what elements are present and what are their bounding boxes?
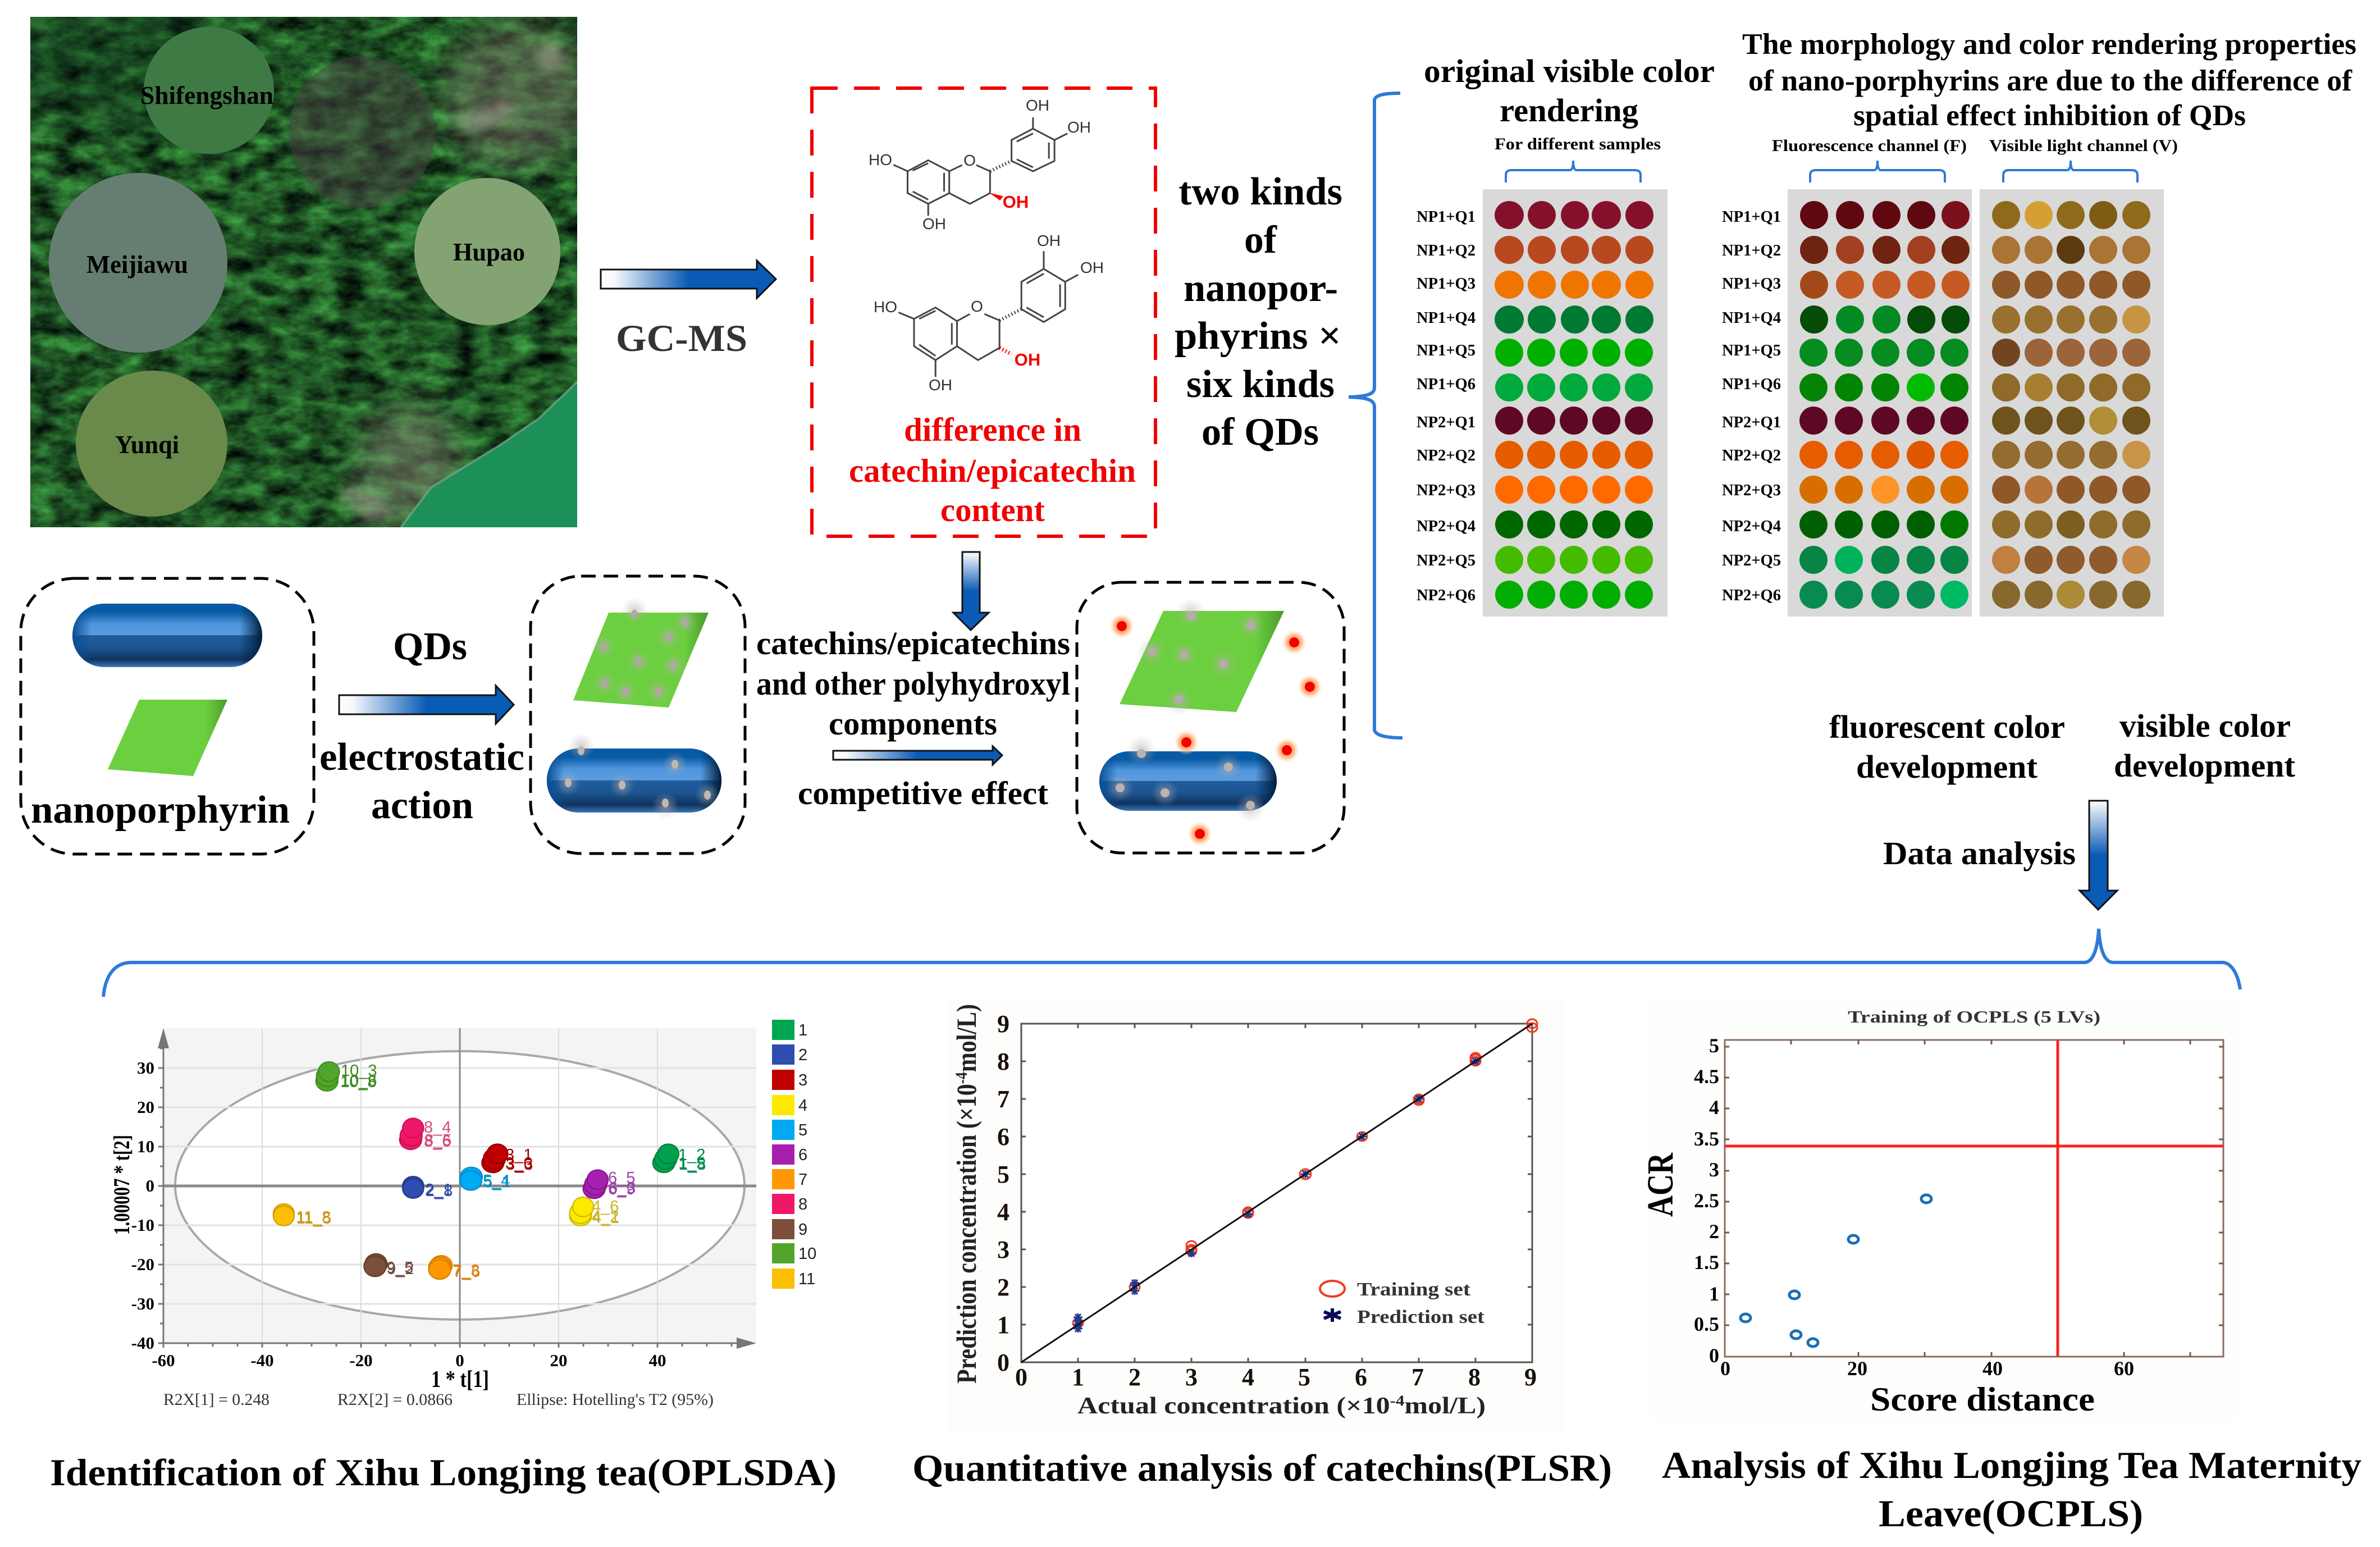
- title: OPLSDA: Identification of Xihu Longjing tea(OPLSDA): [50, 1451, 837, 1494]
- text: visible color development: visible color: [2119, 708, 2291, 744]
- x axis title: Actual concentration (×10: [1077, 1393, 1340, 1419]
- brace: array group: [1349, 93, 1403, 738]
- row labels: original array: NP2+Q4: [1417, 518, 1475, 535]
- row labels: original array: NP2+Q6: [1417, 587, 1475, 604]
- legend: [772, 1020, 816, 1289]
- panel: nanoporphyrin: [21, 578, 314, 854]
- row labels: original array: NP1+Q6: [1417, 376, 1475, 393]
- panel: fluorescence channel array: [1788, 189, 1972, 617]
- y tick labels: [997, 1010, 1009, 1376]
- row labels: original array: NP1+Q3: [1417, 275, 1475, 293]
- y axis title: Prediction concentration (×10: [951, 1026, 982, 1384]
- row labels: channel arrays: NP1+Q6: [1722, 376, 1781, 393]
- molecule: epicatechin: [874, 232, 1104, 394]
- x tick labels: 40: [649, 1350, 666, 1370]
- row labels: original array: NP1+Q5: [1417, 342, 1475, 359]
- x axis title: Score distance: [1870, 1381, 2095, 1418]
- molecule: catechin: OH: [1003, 192, 1029, 212]
- y axis title: ACR: [1640, 1152, 1681, 1217]
- y tick labels: [131, 1058, 154, 1353]
- text: Data analysis: Data analysis: [1883, 835, 2076, 871]
- row labels: channel arrays: NP2+Q2: [1722, 447, 1781, 464]
- x tick labels: -40: [250, 1350, 274, 1370]
- legend: 1: [798, 1021, 807, 1039]
- legend: 11: [798, 1270, 815, 1288]
- legend: 5: [798, 1121, 807, 1139]
- sample clusters: [273, 1062, 679, 1279]
- icon: green nanosheet: [108, 700, 227, 776]
- arrow: add QDs: [339, 686, 514, 724]
- molecule: epicatechin: HO: [874, 298, 897, 316]
- satellite map panel: [30, 17, 577, 527]
- brace: fluorescence: [1810, 161, 1945, 182]
- sample labels: 5_4: [483, 1172, 510, 1190]
- legend: 8: [798, 1195, 807, 1213]
- label: electrostatic action: [319, 736, 524, 827]
- text: fluorescent color development: development: [1856, 749, 2038, 785]
- caption: Fluorescence channel: Fluorescence channel (F): [1772, 136, 1967, 155]
- y tick labels: 5: [997, 1161, 1009, 1188]
- molecule: catechin: O: [963, 152, 976, 169]
- y tick labels: 2: [997, 1274, 1009, 1301]
- sample labels: 8_5: [424, 1131, 451, 1149]
- text: catechins/epicatechins and other polyhydroxyl components: [756, 625, 1070, 742]
- text: visible color development: [2114, 708, 2296, 784]
- label: competitive effect: competitive effect: [798, 775, 1049, 811]
- x tick labels: 40: [1982, 1357, 2003, 1380]
- row labels: original array: NP1+Q1: [1417, 208, 1475, 226]
- y tick labels: 3: [1709, 1158, 1719, 1181]
- legend: 10: [798, 1245, 816, 1263]
- y tick labels: 0.5: [1694, 1313, 1719, 1335]
- text: two kinds of nanoporphyrins x six kinds of QDs: nanopor-: [1184, 267, 1338, 310]
- y tick labels: 3.5: [1694, 1128, 1719, 1150]
- panel: competitive release of QDs: [1077, 582, 1344, 853]
- sample labels: 9_5: [386, 1259, 413, 1277]
- y tick labels: 5: [1709, 1034, 1719, 1057]
- legend: 6: [798, 1146, 807, 1164]
- location: Meijiawu: Meijiawu: [86, 250, 188, 279]
- y axis title: mol/L): [951, 1004, 982, 1072]
- x tick labels: 20: [1847, 1357, 1867, 1380]
- location: Hupao: [414, 178, 560, 325]
- molecule: catechin: OH: [1026, 97, 1049, 114]
- caption: Visible light channel: Visible light channel (V): [1989, 136, 2178, 155]
- y tick labels: 0: [1709, 1344, 1719, 1367]
- row labels: channel arrays: NP2+Q1: [1722, 414, 1781, 431]
- arrow: catechin difference down: [953, 552, 989, 630]
- y tick labels: [1694, 1034, 1719, 1367]
- sample labels: 3_6: [505, 1154, 532, 1172]
- y tick labels: 6: [997, 1123, 1009, 1151]
- row labels: channel arrays: NP2+Q4: [1722, 518, 1781, 535]
- location: Shifengshan: Shifengshan: [140, 81, 273, 109]
- y tick labels: -10: [131, 1215, 154, 1235]
- red caption: content: [940, 491, 1045, 528]
- footnote R2X and ellipse: [163, 1390, 714, 1409]
- y tick labels: 2: [1709, 1220, 1719, 1243]
- row labels: original array: NP1+Q4: [1417, 309, 1475, 327]
- sample labels: 1_2: [678, 1146, 705, 1164]
- x tick labels: -60: [152, 1350, 175, 1370]
- footnote R2X and ellipse: R2X[2] = 0.0866: [337, 1390, 453, 1409]
- sample labels: 8_6: [424, 1133, 451, 1151]
- molecule: epicatechin: OH: [1037, 232, 1061, 249]
- sample labels: 4_1: [592, 1209, 619, 1227]
- text: two kinds of nanoporphyrins x six kinds of QDs: phyrins ×: [1175, 314, 1341, 358]
- y tick labels: 8: [997, 1048, 1009, 1075]
- title: OCPLS: Analysis of Xihu Longjing Tea Maternity: [1662, 1444, 2361, 1486]
- x tick labels: 2: [1129, 1363, 1141, 1391]
- x axis title: mol/L): [1404, 1393, 1486, 1419]
- x tick labels: 5: [1298, 1363, 1310, 1391]
- row labels: channel arrays: NP1+Q5: [1722, 342, 1781, 359]
- panel: catechin epicatechin difference: [812, 88, 1155, 536]
- panel: original color array: [1483, 189, 1668, 617]
- location: Yunqi: Yunqi: [115, 431, 179, 459]
- y tick labels: 20: [137, 1097, 154, 1117]
- text: catechins/epicatechins and other polyhydroxyl components: and other polyhydroxyl: [756, 665, 1070, 702]
- chart: OPLS-DA score plot: [109, 1020, 816, 1409]
- y tick labels: 1: [1709, 1283, 1719, 1305]
- y tick labels: 3: [997, 1236, 1009, 1263]
- label: nanoporphyrin: nanoporphyrin: [31, 788, 290, 832]
- y axis title: -4: [952, 1072, 971, 1084]
- icon: blue nanorod: [72, 604, 262, 667]
- x tick labels: 0: [455, 1350, 464, 1370]
- label: QDs: QDs: [393, 625, 467, 668]
- training samples: [1741, 1195, 1931, 1347]
- row labels: original array: NP1+Q2: [1417, 242, 1475, 259]
- x tick labels: 0: [1720, 1357, 1730, 1380]
- row labels: channel arrays: NP2+Q6: [1722, 587, 1781, 604]
- row labels: original array: NP2+Q1: [1417, 414, 1475, 431]
- brace: samples: [1506, 161, 1641, 182]
- x axis title: 1 * t[1]: [431, 1367, 489, 1393]
- text: two kinds of nanoporphyrins x six kinds of QDs: of: [1244, 218, 1277, 262]
- red caption: catechin/epicatechin: [849, 452, 1136, 489]
- text: visible color development: development: [2114, 747, 2296, 784]
- arrow: competition: [833, 746, 1002, 765]
- sample labels: 10_3: [341, 1062, 377, 1080]
- brace: visible: [2003, 161, 2137, 182]
- molecule: catechin: OH: [922, 215, 946, 232]
- heading: original visible color rendering: rendering: [1500, 92, 1638, 129]
- footnote R2X and ellipse: Ellipse: Hotelling's T2 (95%): [517, 1390, 714, 1409]
- y tick labels: 10: [137, 1137, 154, 1156]
- text: fluorescent color development: [1829, 709, 2065, 785]
- sample labels: 11_8: [296, 1208, 331, 1226]
- row labels: original array: NP2+Q2: [1417, 447, 1475, 464]
- row labels: original array: [1417, 208, 1475, 604]
- arrow: data analysis down: [2080, 801, 2117, 910]
- heading: morphology and color rendering: spatial effect inhibition of QDs: [1853, 99, 2246, 132]
- sample labels: 9_2: [387, 1260, 414, 1278]
- sample labels: 7_3: [453, 1262, 479, 1280]
- x tick labels: 0: [1015, 1363, 1027, 1391]
- sample labels: 11_5: [296, 1210, 331, 1227]
- row labels: channel arrays: NP1+Q3: [1722, 275, 1781, 293]
- sample labels: 3_3: [506, 1156, 533, 1174]
- text: two kinds of nanoporphyrins x six kinds of QDs: six kinds: [1186, 363, 1335, 406]
- icon: blue rod with QDs: [547, 733, 721, 819]
- icon: released red QDs: [1109, 614, 1322, 846]
- row labels: channel arrays: NP1+Q1: [1722, 208, 1781, 226]
- y tick labels: 9: [997, 1010, 1009, 1038]
- sample labels: 7_6: [453, 1263, 480, 1281]
- x tick labels: 1: [1072, 1363, 1084, 1391]
- text: catechins/epicatechins and other polyhydroxyl components: catechins/epicatechins: [756, 625, 1070, 661]
- chart title: Training of OCPLS (5 LVs): [1848, 1007, 2100, 1026]
- y axis title: 1.00007 * t[2]: [109, 1135, 134, 1235]
- sample labels: 5_1: [483, 1173, 510, 1191]
- sample labels: 2_1: [425, 1181, 452, 1199]
- text: two kinds of nanoporphyrins x six kinds of QDs: two kinds: [1178, 170, 1342, 213]
- title: OCPLS: [1662, 1444, 2361, 1535]
- x tick labels: 4: [1242, 1363, 1254, 1391]
- sample labels: 4_6: [592, 1198, 619, 1216]
- molecule: epicatechin: OH: [1015, 350, 1040, 369]
- legend: 9: [798, 1221, 807, 1239]
- title: PLSR: Quantitative analysis of catechins(PLSR): [912, 1446, 1612, 1489]
- icon: blue rod after release: [1099, 736, 1277, 822]
- sample labels: 10_6: [341, 1072, 377, 1090]
- row labels: channel arrays: [1722, 208, 1781, 604]
- heading: original visible color rendering: original visible color: [1424, 53, 1715, 89]
- arrow: map to GC-MS: [601, 261, 776, 298]
- molecule: catechin: OH: [1067, 118, 1091, 136]
- x tick labels: 6: [1355, 1363, 1367, 1391]
- molecule: epicatechin: OH: [1080, 259, 1104, 276]
- heading: morphology and color rendering: The morphology and color rendering properties: [1742, 28, 2356, 61]
- sample labels: 10_8: [340, 1073, 377, 1091]
- x tick labels: -20: [349, 1350, 373, 1370]
- location: Shifengshan: [140, 27, 274, 154]
- sample labels: 6_9: [608, 1180, 635, 1198]
- label: electrostatic action: action: [371, 784, 473, 827]
- sample labels: 1_8: [679, 1156, 706, 1174]
- location: Meijiawu: [49, 173, 227, 353]
- y tick labels: 1.5: [1694, 1251, 1719, 1274]
- footnote R2X and ellipse: R2X[1] = 0.248: [163, 1390, 269, 1409]
- threshold lines: [1725, 1040, 2223, 1357]
- chart: PLSR prediction vs actual: [948, 1000, 1565, 1432]
- y tick labels: 4: [997, 1198, 1009, 1226]
- row labels: original array: NP2+Q5: [1417, 552, 1475, 569]
- icon: green sheet after release: [1120, 599, 1284, 715]
- sample labels: 3_1: [505, 1146, 532, 1164]
- x axis title: -4: [1390, 1393, 1404, 1409]
- location: Hupao: Hupao: [453, 238, 525, 266]
- sample labels: 8_4: [424, 1119, 451, 1137]
- chart: OCPLS training: [1640, 1000, 2237, 1421]
- y tick labels: 4: [1709, 1096, 1719, 1119]
- row labels: channel arrays: NP1+Q2: [1722, 242, 1781, 259]
- text: fluorescent color development: fluorescent color: [1829, 709, 2065, 745]
- y tick labels: 0: [146, 1176, 154, 1195]
- y tick labels: -20: [131, 1254, 154, 1274]
- training points: [1073, 1019, 1537, 1327]
- sample labels: 2_8: [426, 1182, 453, 1200]
- legend: 7: [798, 1171, 807, 1189]
- sample labels: 6_5: [608, 1169, 635, 1187]
- x tick labels: 60: [2114, 1357, 2134, 1380]
- GC-MS label: GC-MS: [616, 317, 747, 359]
- sample labels: 6_3: [609, 1179, 636, 1197]
- prediction points: [1073, 1057, 1480, 1332]
- caption: For different samples: For different samples: [1495, 135, 1661, 153]
- red caption: [849, 411, 1136, 528]
- heading: morphology and color rendering: [1742, 28, 2356, 132]
- y tick labels: 0: [997, 1349, 1009, 1376]
- y tick labels: -40: [131, 1333, 154, 1353]
- molecule: catechin: [869, 97, 1091, 232]
- legend: 3: [798, 1071, 807, 1089]
- heading: original visible color rendering: [1424, 53, 1715, 129]
- row labels: channel arrays: NP2+Q3: [1722, 482, 1781, 499]
- panel: QD-loaded nanoporphyrin: [531, 576, 745, 854]
- location: Yunqi: [76, 371, 227, 517]
- row labels: channel arrays: NP1+Q4: [1722, 309, 1781, 327]
- x tick labels: 7: [1411, 1363, 1424, 1391]
- text: catechins/epicatechins and other polyhydroxyl components: components: [829, 705, 997, 742]
- row labels: channel arrays: NP2+Q5: [1722, 552, 1781, 569]
- title: OCPLS: Leave(OCPLS): [1879, 1492, 2143, 1535]
- legend: [1320, 1279, 1485, 1327]
- y tick labels: 7: [997, 1085, 1009, 1113]
- x tick labels: [1720, 1357, 2134, 1380]
- panel: visible light channel array: [1980, 189, 2164, 617]
- sample labels: 1_5: [678, 1154, 705, 1172]
- molecule: epicatechin: O: [971, 298, 983, 315]
- red caption: difference in: [904, 411, 1081, 448]
- y tick labels: 30: [137, 1058, 154, 1078]
- y tick labels: 2.5: [1694, 1189, 1719, 1212]
- y tick labels: 4.5: [1694, 1065, 1719, 1088]
- molecule: epicatechin: OH: [929, 376, 952, 394]
- legend: 4: [798, 1097, 807, 1115]
- x tick labels: [1015, 1363, 1537, 1391]
- heading: morphology and color rendering: of nano-porphyrins are due to the difference of: [1748, 65, 2352, 97]
- text: two kinds of nanoporphyrins x six kinds of QDs: [1175, 170, 1342, 454]
- molecule: catechin: HO: [869, 151, 892, 168]
- y tick labels: 1: [997, 1311, 1009, 1339]
- x tick labels: 20: [550, 1350, 567, 1370]
- legend: Prediction set: [1357, 1307, 1485, 1327]
- axes: [158, 1028, 756, 1349]
- x tick labels: 3: [1185, 1363, 1198, 1391]
- sample labels: 4_2: [592, 1208, 619, 1226]
- label: electrostatic action: electrostatic: [319, 736, 524, 779]
- sample labels: [296, 1062, 706, 1281]
- x tick labels: [152, 1350, 666, 1370]
- legend: 2: [798, 1046, 807, 1064]
- y tick labels: -30: [131, 1294, 154, 1313]
- text: two kinds of nanoporphyrins x six kinds of QDs: of QDs: [1202, 410, 1319, 454]
- x tick labels: 8: [1468, 1363, 1481, 1391]
- legend: Training set: [1357, 1279, 1471, 1300]
- row labels: original array: NP2+Q3: [1417, 482, 1475, 499]
- brace: data analysis group: [103, 929, 2240, 997]
- x tick labels: 9: [1524, 1363, 1537, 1391]
- icon: green sheet with QDs: [573, 597, 709, 708]
